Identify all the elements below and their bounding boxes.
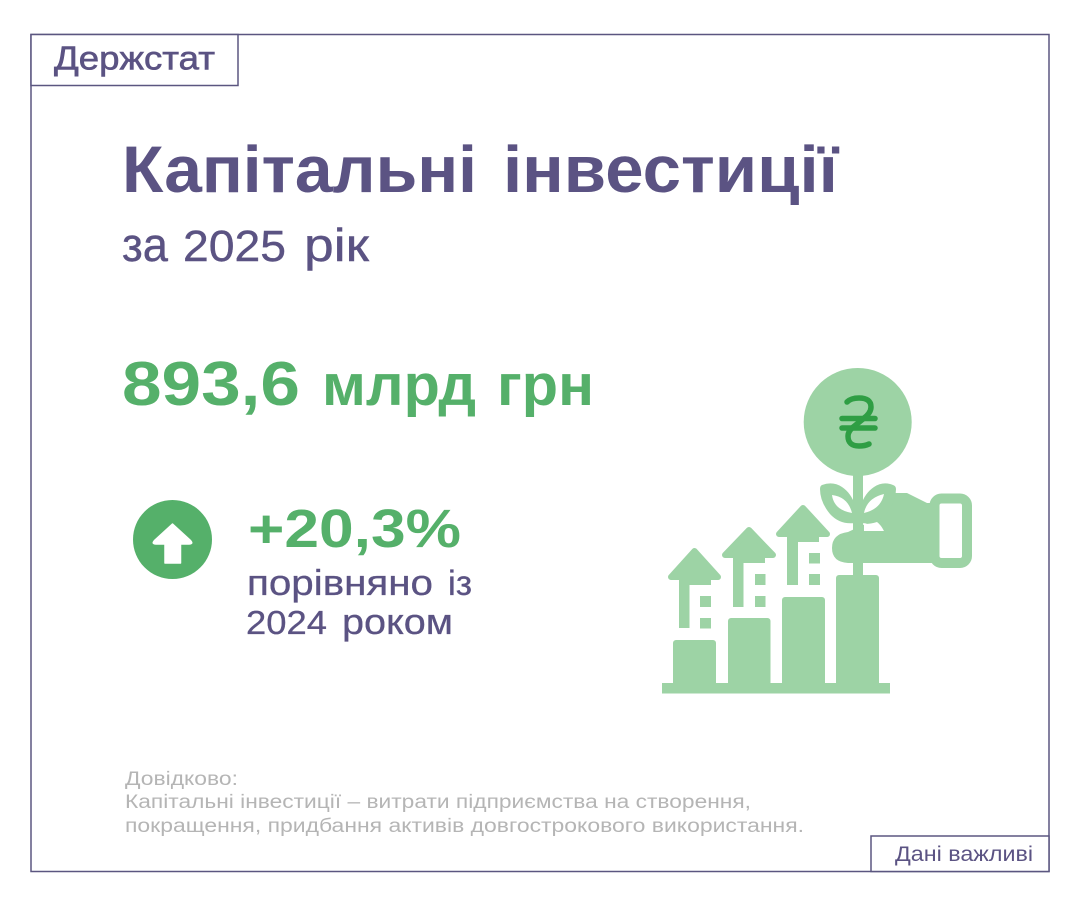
logo box: Держстат: Держстат <box>54 40 215 76</box>
icon part: plant stem <box>853 470 863 578</box>
main value <box>122 350 594 419</box>
logo box: Держстат <box>31 34 238 86</box>
icon: investment growth illustration <box>662 368 967 694</box>
subtitle: за <box>122 218 169 271</box>
reference note: Довідково: <box>125 769 238 790</box>
reference note: покращення, придбання активів довгострокового використання. <box>125 816 804 837</box>
subtitle: 2025 <box>183 222 286 271</box>
subtitle <box>122 218 370 271</box>
icon part: coin <box>804 368 912 476</box>
comparison text: 2024 <box>246 604 327 641</box>
comparison text: порівняно <box>247 562 433 603</box>
footer box: Дані важливі: Дані важливі <box>895 843 1033 866</box>
icon part: hryvnia sign <box>842 398 875 446</box>
footer box: Дані важливі <box>871 836 1049 872</box>
icon: up arrow in green circle <box>133 500 212 579</box>
main value: млрд <box>322 353 476 418</box>
title: інвестиції <box>503 132 839 206</box>
icon part: base line <box>662 683 890 694</box>
icon part: bars <box>673 575 879 688</box>
subtitle: рік <box>304 219 370 271</box>
comparison text: із <box>448 564 472 603</box>
icon part: gap between leaf and finger <box>864 522 884 531</box>
growth percentage: +20,3% <box>248 499 461 559</box>
reference note: Капітальні інвестиції – витрати підприємства на створення, <box>125 792 751 813</box>
comparison text: роком <box>342 601 453 642</box>
reference note <box>125 769 804 837</box>
icon part: leaves <box>820 483 896 523</box>
icon part: windows <box>700 553 820 628</box>
comparison text <box>246 562 472 642</box>
title: Капітальні <box>122 132 477 206</box>
title <box>122 132 839 206</box>
main value: 893,6 <box>122 350 300 419</box>
icon part: arrows <box>671 508 827 628</box>
main value: грн <box>497 353 594 418</box>
icon part: hand <box>832 493 967 563</box>
